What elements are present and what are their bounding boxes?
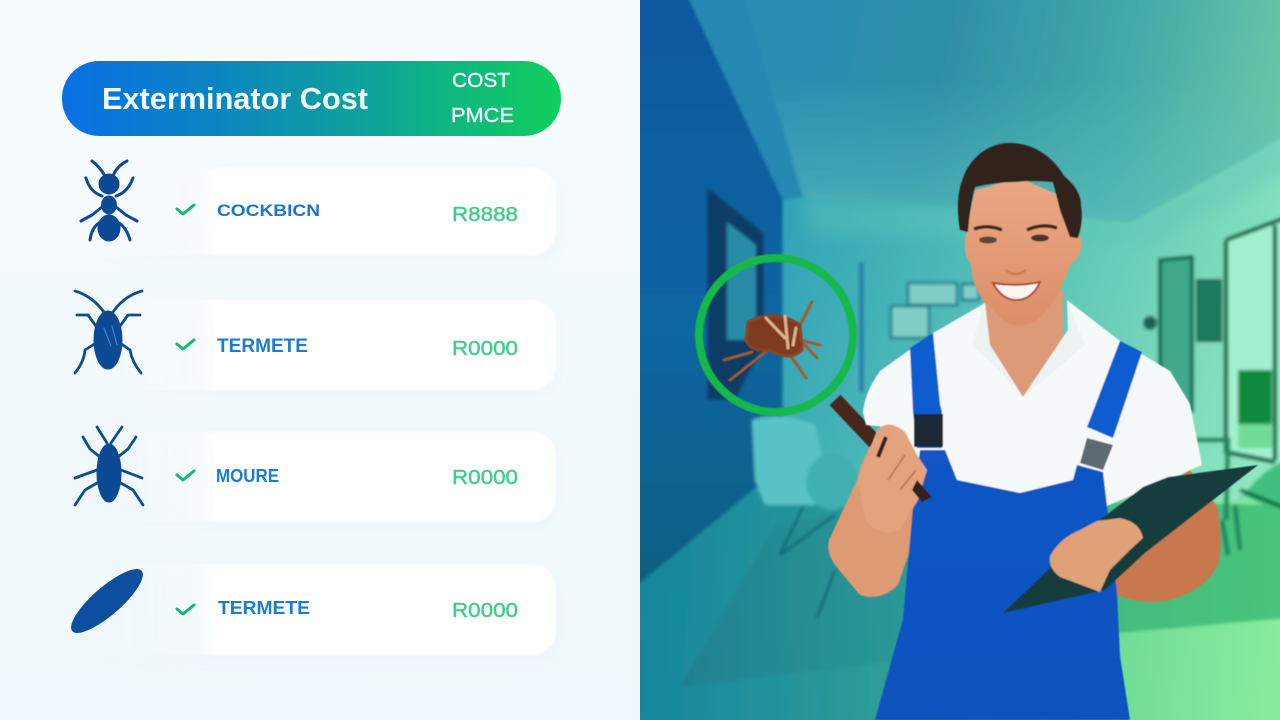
check mark bbox=[177, 205, 194, 214]
door bbox=[1160, 257, 1192, 410]
left strap bbox=[910, 333, 942, 448]
left window bbox=[707, 187, 764, 400]
heading: Exterminator Cost: Exterminator Cost bbox=[102, 81, 368, 116]
collar bbox=[972, 300, 1085, 397]
chair seat bbox=[806, 454, 858, 510]
row: cockroach bbox=[81, 161, 556, 255]
icon: beetle bbox=[75, 291, 142, 373]
icon: ant bbox=[81, 161, 137, 241]
left buckle bbox=[914, 414, 943, 447]
handle end bbox=[912, 480, 932, 502]
hair bbox=[958, 143, 1082, 238]
column label: price: PMCE bbox=[451, 104, 514, 127]
icon: larva bbox=[63, 560, 151, 642]
wall lamp bbox=[1143, 316, 1157, 330]
handle between fingers bbox=[878, 437, 886, 457]
check mark bbox=[177, 340, 194, 349]
face bbox=[965, 178, 1082, 325]
price: R0000 bbox=[452, 467, 518, 489]
price: R0000 bbox=[452, 338, 518, 360]
clipboard bbox=[1003, 465, 1258, 613]
bug under lens bbox=[724, 302, 820, 380]
pest name: TERMETE bbox=[218, 597, 310, 618]
column label: cost: COST bbox=[452, 69, 510, 92]
left hand bbox=[858, 424, 927, 532]
wall column bbox=[859, 262, 864, 392]
row: mouse bbox=[75, 427, 556, 522]
pest name: MOURE bbox=[216, 466, 279, 486]
nose bbox=[1006, 270, 1026, 274]
wall picture bbox=[1197, 280, 1221, 341]
shirt bbox=[863, 300, 1202, 506]
smile bbox=[993, 282, 1040, 300]
person: exterminator bbox=[828, 143, 1258, 720]
picture frames bbox=[891, 283, 979, 338]
pest name: TERMETE bbox=[217, 336, 308, 357]
right arm bbox=[1050, 470, 1221, 602]
large window bbox=[1225, 218, 1280, 462]
magnifier ring bbox=[699, 258, 853, 412]
right hand bbox=[1050, 518, 1143, 592]
check mark bbox=[177, 605, 194, 614]
left arm bbox=[828, 432, 927, 597]
floor bbox=[620, 490, 1280, 720]
overalls bbox=[875, 450, 1130, 720]
row: termite bbox=[75, 291, 556, 390]
right buckle bbox=[1080, 438, 1113, 470]
row: termite second bbox=[63, 560, 556, 655]
eyebrows and eyes bbox=[974, 226, 1057, 244]
panel: cost table bbox=[0, 0, 640, 720]
header pill bbox=[62, 61, 561, 136]
magnifier handle bbox=[835, 400, 925, 495]
ceiling tray band bbox=[807, 140, 1280, 237]
left wall soffit bbox=[680, 0, 803, 200]
ceiling bbox=[740, 0, 1280, 223]
chair legs bbox=[780, 507, 835, 618]
armchair bbox=[752, 416, 830, 505]
right strap bbox=[1087, 341, 1142, 438]
neck bbox=[983, 290, 1063, 397]
photo: interior scene bbox=[620, 0, 1280, 720]
price: R0000 bbox=[452, 600, 518, 622]
rug bbox=[680, 500, 1280, 687]
magnifying glass bbox=[699, 258, 925, 495]
price: R8888 bbox=[452, 204, 518, 226]
finger lines bbox=[888, 455, 916, 490]
check mark bbox=[177, 471, 194, 480]
left wall bbox=[640, 0, 784, 586]
right chair and bench bbox=[1195, 440, 1280, 555]
pest name: COCKBICN bbox=[217, 201, 320, 220]
icon: roach bbox=[75, 427, 143, 505]
